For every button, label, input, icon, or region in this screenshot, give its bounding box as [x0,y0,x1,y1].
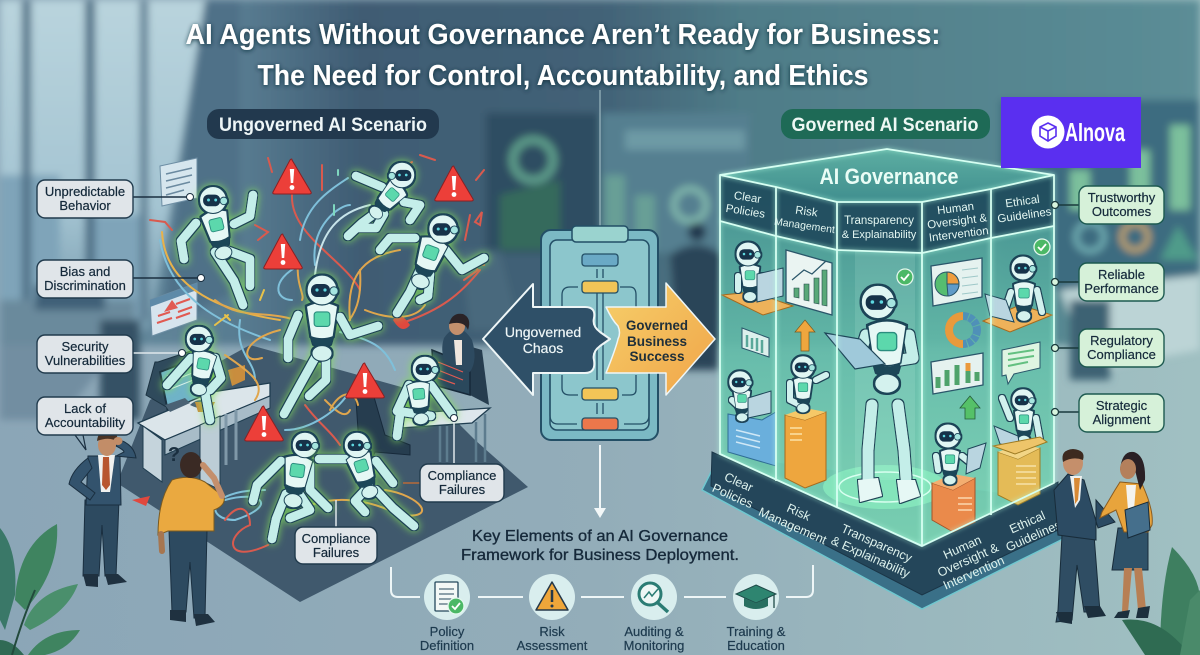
header: transparency and explainability: & Explainability [842,229,917,241]
base label: ethical guidelines: Guidelines [1004,518,1063,554]
heading: ungoverned scenario [207,109,439,139]
arrow: ungoverned chaos: Chaos [523,340,563,356]
label: compliance failures lower [295,500,377,564]
label: unpredictable behavior [37,180,194,218]
tablet: panel four [966,443,986,474]
robot: upper left [181,186,253,305]
label: regulatory compliance: Compliance [1087,347,1156,362]
people: business handshake [1054,449,1152,624]
text: risk assessment: Risk [539,624,565,639]
text: risk assessment [517,624,588,653]
label: reliable performance: Performance [1084,281,1159,296]
base label: transparency and explainability: Transparency [839,522,915,565]
base label: human oversight and intervention: Intervention [941,553,1006,593]
header: clear policies: Clear [733,190,762,206]
gear [949,316,977,344]
label: reliable performance: Reliable [1098,267,1145,282]
header band [720,149,1054,253]
robot: panel five lower [1002,389,1040,445]
arrow: ungoverned chaos: Ungoverned [505,324,581,340]
icon: risk assessment [529,574,575,620]
glass walls [720,149,1054,546]
label: lack of accountability [37,397,133,450]
logo: AInova: AInova [1065,117,1125,147]
panel: AI governance glass cube [702,149,1065,609]
central transition device [541,226,658,440]
heading: governed scenario: Governed AI Scenario [792,115,978,136]
icon: auditing and monitoring [631,574,677,620]
arrow: governed business success: Business [627,333,687,349]
header: ethical guidelines: Ethical [1005,194,1041,210]
right desk [355,345,490,470]
text: risk assessment: Assessment [517,638,588,653]
label: compliance failures right: Failures [439,482,486,497]
laptop: panel one upper [757,268,783,302]
icon: training and education [733,574,779,620]
header: ethical guidelines: Guidelines [997,206,1053,226]
block: orange column [785,408,826,488]
arrow: governed business success: Success [630,348,685,364]
text: auditing and monitoring: Monitoring [624,638,684,653]
block: yellow column [998,444,1040,505]
label: security vulnerabilities [37,335,186,373]
warning triangles [245,159,473,441]
header: transparency and explainability: Transparency [844,215,914,227]
robot: at right desk [397,356,452,436]
title: AI Agents Without Governance Aren’t Ready for Business: [186,19,940,51]
robot: at left desk [167,326,221,420]
key elements row [391,565,813,653]
base label: clear policies: Clear [722,470,755,495]
robot: right [380,215,484,313]
bar card [931,353,983,394]
arrow: up green [960,396,980,419]
person: man in yellow shirt [158,452,224,626]
text: training and education [727,624,786,653]
laptop: governance lead [825,333,885,369]
plant: right [1122,547,1200,655]
icon: logo cube [1032,116,1064,148]
floor glow [823,250,947,509]
label: lack of accountability: Accountability [45,415,126,430]
label: security vulnerabilities: Vulnerabilities [45,353,126,368]
text: auditing and monitoring [624,624,684,653]
platform [702,452,1065,609]
header: clear policies: Policies [725,203,766,221]
header: human oversight and intervention: Intervention [928,225,989,244]
label: strategic alignment: Strategic [1096,398,1148,413]
arrow: governed business success [606,283,715,395]
label: compliance failures lower: Failures [313,545,360,560]
small chart card [742,328,769,357]
arrow: down to key elements [594,445,606,518]
robot: top right [348,162,420,236]
header: human oversight and intervention: Oversight & [927,212,988,232]
arrow: up orange [795,320,815,351]
labels: ungoverned risks [37,180,504,564]
label: trustworthy outcomes: Outcomes [1092,204,1152,219]
person: worried man with tie [69,431,136,587]
laptop and desk: panel five lower [993,426,1047,454]
header: human oversight and intervention: Human [937,201,975,217]
robot: panel four [936,424,972,485]
robot: panel two [790,356,826,413]
heading: AI governance: AI Governance [820,164,958,189]
status checks [897,239,1050,285]
left desk [138,348,270,490]
text: training and education: Education [727,638,785,653]
text: policy definition: Policy [430,624,465,639]
title: The Need for Control, Accountability, and Ethics [258,60,868,92]
desk: orange upper right [983,305,1052,332]
label: regulatory compliance: Regulatory [1090,333,1153,348]
label: strategic alignment: Alignment [1093,412,1151,427]
heading: governed scenario [781,109,990,139]
base label: risk management: Risk [785,501,813,524]
label: compliance failures right [403,414,504,502]
label: bias and discrimination: Bias and [60,264,110,279]
plant: left [0,524,80,655]
laptop: panel five upper [985,294,1014,322]
arrow: governed business success: Governed [626,317,688,333]
title [186,19,940,92]
desk: orange upper left [722,292,793,315]
robot: central [284,275,378,414]
arrow: ungoverned chaos [483,284,610,395]
chaotic paths [132,155,484,552]
label: unpredictable behavior: Unpredictable [45,184,125,199]
text: policy definition [420,624,474,653]
glass edges [720,149,1054,546]
robot: lower right [319,432,414,526]
person: businesswoman [1100,452,1152,618]
laptop: panel one lower [748,391,771,418]
base label: human oversight and intervention: Human [941,533,984,562]
robot: panel one lower [729,371,752,422]
person: businessman [1054,449,1115,624]
base label: ethical guidelines: Ethical [1007,508,1047,536]
pie card [931,258,982,306]
block: blue desk [728,412,776,466]
header: risk management: Management [773,216,836,236]
base label: clear policies: Policies [710,481,755,511]
block: coral column [932,474,975,532]
dark floor patch [117,345,528,602]
heading: key elements [461,528,739,564]
panel: chaotic ungoverned scene [132,155,490,552]
text: training and education: Training & [727,624,786,639]
heading: ungoverned scenario: Ungoverned AI Scenario [219,115,427,136]
robot: panel one upper [736,242,768,302]
label: regulatory compliance [1052,329,1164,367]
header: risk management: Risk [795,205,819,220]
woman at desk [442,314,475,372]
labels: governed outcomes [1052,186,1164,432]
base label: risk management: Management [756,505,829,547]
text: policy definition: Definition [420,638,474,653]
robot: governance lead with laptop [858,285,920,503]
label: reliable performance [1052,263,1164,301]
text: auditing and monitoring: Auditing & [624,624,684,639]
chart card: line and bars [786,250,832,315]
heading: key elements: Key Elements of an AI Governance [472,528,728,545]
label: compliance failures lower: Compliance [302,531,370,546]
robot: lower left [253,432,328,539]
label: trustworthy outcomes [1052,186,1164,224]
logo: AInova [1001,97,1141,168]
label: bias and discrimination: Discrimination [44,278,126,293]
label: bias and discrimination [37,260,204,298]
speech bubble [1002,342,1040,384]
icon: policy definition [424,574,470,620]
robot: panel five upper [1005,256,1042,321]
label: compliance failures right: Compliance [428,468,496,483]
label: security vulnerabilities: Security [62,339,109,354]
label: strategic alignment [1052,394,1164,432]
base label: transparency and explainability: & Explainability [829,533,913,581]
heading: key elements: Framework for Business Deployment. [461,547,739,564]
label: lack of accountability: Lack of [64,401,106,416]
question mark: ? [168,444,180,466]
label: unpredictable behavior: Behavior [59,198,111,213]
floating error window [150,283,197,336]
label: trustworthy outcomes: Trustworthy [1088,190,1156,205]
base label: human oversight and intervention: Oversight & [935,540,1001,580]
floating document [160,158,197,206]
